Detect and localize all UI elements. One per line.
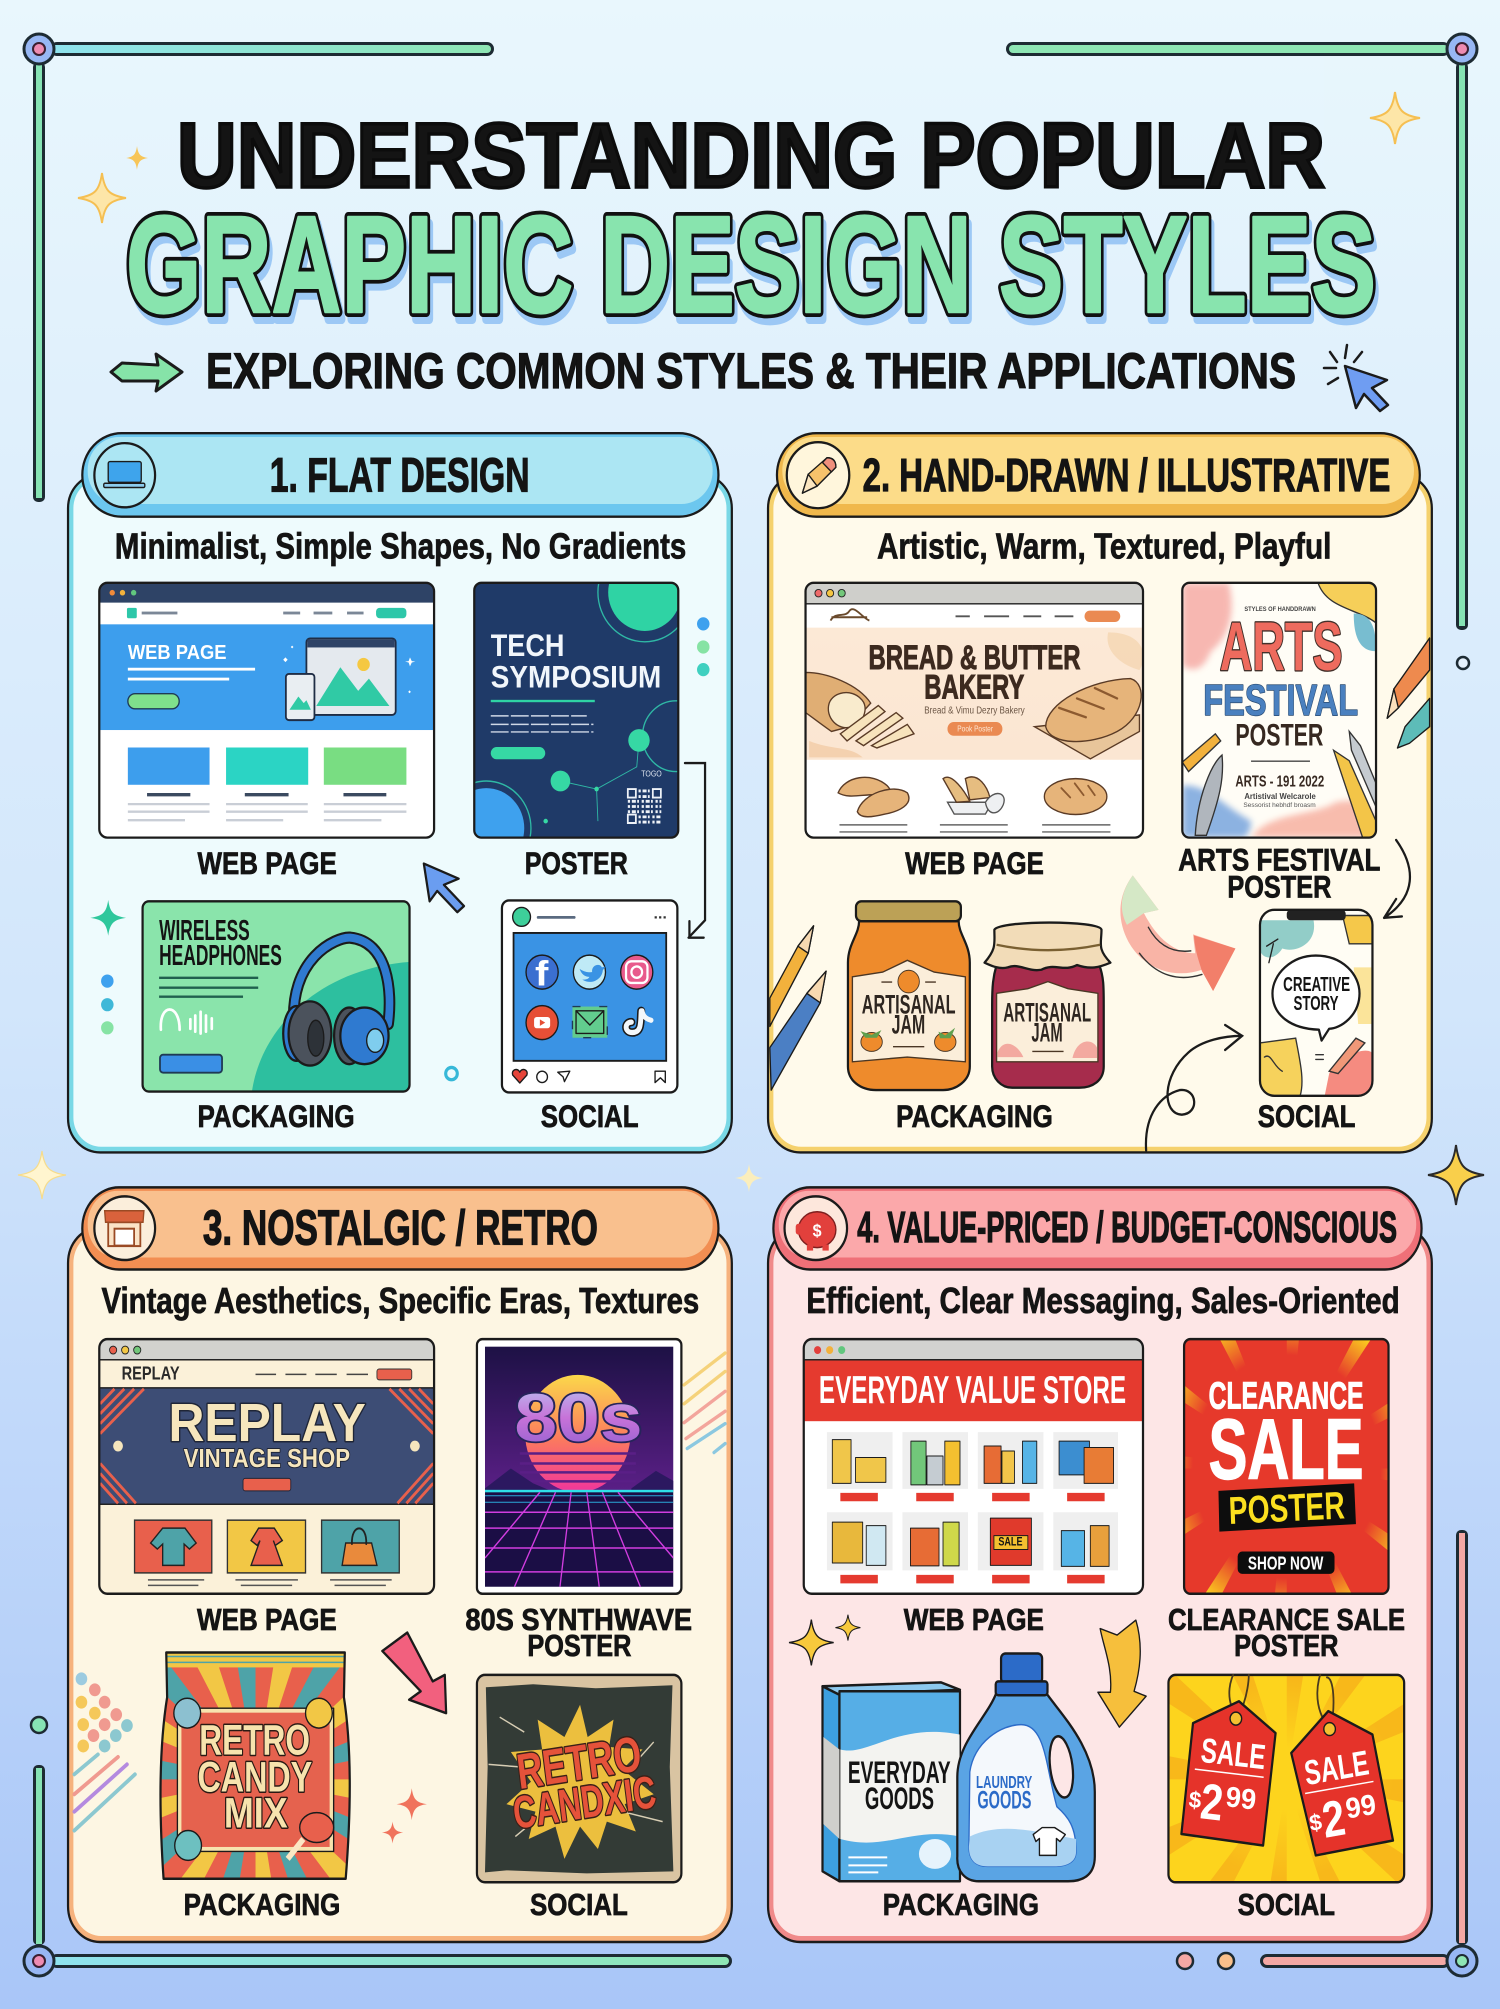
ring — [446, 1067, 457, 1080]
mockup: sale tags social: SALE — [1302, 1744, 1371, 1794]
mockup: sale tags social: 2 — [1198, 1773, 1226, 1832]
sparkles between panels — [18, 1145, 1484, 1205]
mockup: tech poster: TOGO — [641, 769, 662, 778]
mockup: tech poster: TECH — [491, 629, 564, 663]
label: 80S SYNTHWAVE — [465, 1603, 692, 1637]
mockup: synthwave poster: 80s — [514, 1380, 643, 1456]
mockup: candy bag: MIX — [224, 1789, 288, 1837]
mockup: replay web page: REPLAY — [122, 1363, 180, 1384]
mockup: sale tags social: $ — [1188, 1786, 1203, 1814]
mockup: phone story — [1260, 910, 1372, 1096]
mockup: clearance sale poster — [1182, 1338, 1390, 1595]
header bar — [773, 1187, 1422, 1269]
sparkle — [90, 900, 126, 936]
mockup: value store web page — [804, 1339, 1143, 1594]
arrow: yellow — [1098, 1620, 1146, 1727]
label: POSTER — [525, 847, 628, 881]
label — [465, 1603, 692, 1663]
mockup: value store web page: SALE — [998, 1536, 1023, 1549]
label: PACKAGING — [896, 1100, 1053, 1134]
label: WEB PAGE — [905, 847, 1044, 881]
mockup: headphones packaging: WIRELESS — [159, 914, 250, 946]
sparkles — [382, 1788, 427, 1843]
icon: box everyday goods: EVERYDAY — [848, 1755, 951, 1790]
mockup: bakery web page: BREAD & BUTTER — [868, 639, 1081, 677]
label: POSTER — [1227, 871, 1331, 905]
icon: box everyday goods — [822, 1682, 960, 1881]
panel: nostalgic retro — [68, 1187, 732, 1942]
icon: box everyday goods: GOODS — [865, 1782, 934, 1817]
mockup: arts festival poster: Artistival Welcarole — [1244, 792, 1316, 801]
label — [1178, 844, 1380, 905]
header bar — [82, 433, 718, 517]
description: Vintage Aesthetics, Specific Eras, Textures — [102, 1282, 699, 1322]
mockup: candy bag — [159, 1651, 351, 1880]
header bar — [82, 1187, 718, 1269]
mockup: arts festival poster: STYLES OF HANDDRAWN — [1244, 607, 1316, 613]
mockup: social post: f — [535, 955, 549, 994]
icon: pencil — [787, 442, 849, 508]
mockup: phone story: STORY — [1293, 992, 1339, 1015]
label: WEB PAGE — [197, 1603, 337, 1637]
mockup: replay web page — [99, 1339, 434, 1594]
label: POSTER — [1234, 1629, 1339, 1663]
description: Efficient, Clear Messaging, Sales-Oriented — [806, 1282, 1400, 1322]
panel: hand-drawn — [768, 433, 1432, 1152]
label: WEB PAGE — [197, 847, 337, 881]
dots — [697, 617, 710, 676]
label: SOCIAL — [1258, 1100, 1355, 1134]
mockup: bakery web page: Pook Poster — [957, 724, 993, 734]
mockup: social post — [502, 900, 677, 1092]
jar: berry: JAM — [1031, 1019, 1063, 1048]
mockup: arts festival poster: Sessorist hebhdf broasm — [1243, 802, 1316, 809]
label: ARTS FESTIVAL — [1178, 844, 1380, 878]
mockup: arts festival poster: ARTS - 191 2022 — [1235, 773, 1324, 791]
mockup: tech poster — [473, 582, 680, 839]
label: POSTER — [527, 1629, 631, 1663]
mockup: arts festival poster: POSTER — [1235, 719, 1323, 753]
label — [1168, 1603, 1405, 1663]
title: understanding popular: UNDERSTANDING POPULAR — [177, 105, 1325, 207]
arrow: pink — [382, 1633, 446, 1713]
dots decor left — [74, 1672, 135, 1831]
label: PACKAGING — [197, 1100, 355, 1134]
mockup: bakery web page — [806, 583, 1143, 838]
description: Minimalist, Simple Shapes, No Gradients — [115, 526, 686, 566]
icon: pencils left — [770, 926, 826, 1090]
mockup: headphones packaging: HEADPHONES — [159, 939, 282, 971]
description: Artistic, Warm, Textured, Playful — [877, 526, 1331, 566]
jar: orange — [848, 901, 970, 1090]
stripes decor right blue — [687, 1424, 725, 1453]
mockup: value store web page: EVERYDAY VALUE STORE — [819, 1368, 1126, 1411]
jar: berry — [985, 923, 1110, 1088]
icon: pencils right — [1387, 638, 1430, 748]
mockup: phone story: CREATIVE — [1283, 974, 1350, 996]
label: SOCIAL — [541, 1100, 639, 1134]
mockup: web page — [99, 583, 434, 838]
icon: storefront — [94, 1196, 155, 1260]
mockup: candy bag: CANDY — [197, 1753, 312, 1801]
arrow: poster to social — [685, 763, 705, 938]
dots — [101, 974, 114, 1034]
mockup: replay web page: VINTAGE SHOP — [184, 1445, 350, 1473]
label: SOCIAL — [1238, 1888, 1335, 1922]
icon: laundry bottle: GOODS — [977, 1788, 1031, 1815]
jar: berry: ARTISANAL — [1003, 999, 1091, 1028]
mockup: arts festival poster: FESTIVAL — [1203, 676, 1358, 724]
label: PACKAGING — [883, 1888, 1039, 1922]
heading: 1. FLAT DESIGN — [270, 449, 530, 502]
mockup: bakery web page: BAKERY — [924, 669, 1024, 707]
panel: flat design — [68, 433, 732, 1152]
arrow: curved top — [1384, 840, 1410, 918]
icon: cursor — [424, 864, 464, 912]
mockup: retro candy social: CANDXIC — [510, 1767, 659, 1839]
label: WEB PAGE — [904, 1603, 1044, 1637]
mockup: sale tags social: 99 — [1224, 1780, 1258, 1816]
mockup: retro candy social — [477, 1675, 681, 1882]
sparkles around title — [78, 90, 1422, 223]
mockup: synthwave poster — [477, 1339, 681, 1594]
mockup: sale tags social: $ — [1308, 1808, 1324, 1837]
icon: piggy bank: $ — [813, 1221, 822, 1241]
mockup: clearance sale poster: SALE — [1209, 1402, 1364, 1497]
label: PACKAGING — [184, 1888, 340, 1922]
decorative frame: top left corner — [24, 34, 494, 502]
mockup: tech poster: SYMPOSIUM — [491, 661, 661, 695]
icon: laundry bottle — [957, 1653, 1095, 1881]
mockup: clearance sale poster: POSTER — [1228, 1484, 1346, 1532]
mockup: clearance sale poster: SHOP NOW — [1248, 1553, 1323, 1574]
jar: orange: JAM — [892, 1011, 925, 1040]
mockup: replay web page: REPLAY — [168, 1393, 366, 1453]
arrow: watercolor — [1120, 875, 1235, 991]
heading: 3. NOSTALGIC / RETRO — [203, 1200, 598, 1255]
decorative frame: top right corner — [1006, 34, 1477, 669]
jar: orange: ARTISANAL — [862, 991, 956, 1020]
mockup: web page: WEB PAGE — [128, 642, 227, 664]
mockup: sale tags social: SALE — [1199, 1731, 1267, 1778]
decorative frame: bottom left corner — [24, 1717, 732, 1976]
mockup: retro candy social: RETRO — [514, 1726, 644, 1801]
decorative frame: bottom right corner — [1177, 1530, 1477, 1976]
mockup: sale tags social: 2 — [1319, 1789, 1349, 1849]
icon: subtitle arrow — [111, 354, 182, 391]
mockup: sale tags social — [1168, 1675, 1404, 1882]
stripes decor right coral — [684, 1391, 725, 1439]
arrow: looped — [1146, 1025, 1242, 1151]
mockup: headphones packaging — [143, 901, 413, 1092]
mockup: candy bag: RETRO — [199, 1716, 310, 1764]
stripes decor right — [684, 1353, 725, 1404]
mockup: bakery web page: Bread & Vimu Dezry Bakery — [924, 705, 1025, 717]
mockup: arts festival poster: ARTS — [1220, 608, 1343, 686]
icon: cursor with clicks — [1324, 345, 1388, 411]
panel: value-priced — [768, 1187, 1432, 1942]
label: SOCIAL — [530, 1888, 628, 1922]
mockup: clearance sale poster: CLEARANCE — [1209, 1374, 1364, 1417]
icon: laptop — [94, 443, 155, 507]
mockup: sale tags social: 99 — [1343, 1788, 1378, 1825]
mockup: arts festival poster — [1182, 583, 1376, 838]
label: CLEARANCE SALE — [1168, 1603, 1405, 1637]
icon: piggy bank — [785, 1196, 847, 1260]
header bar — [777, 433, 1420, 517]
icon: laundry bottle: LAUNDRY — [976, 1772, 1033, 1792]
sparkles — [789, 1615, 860, 1665]
